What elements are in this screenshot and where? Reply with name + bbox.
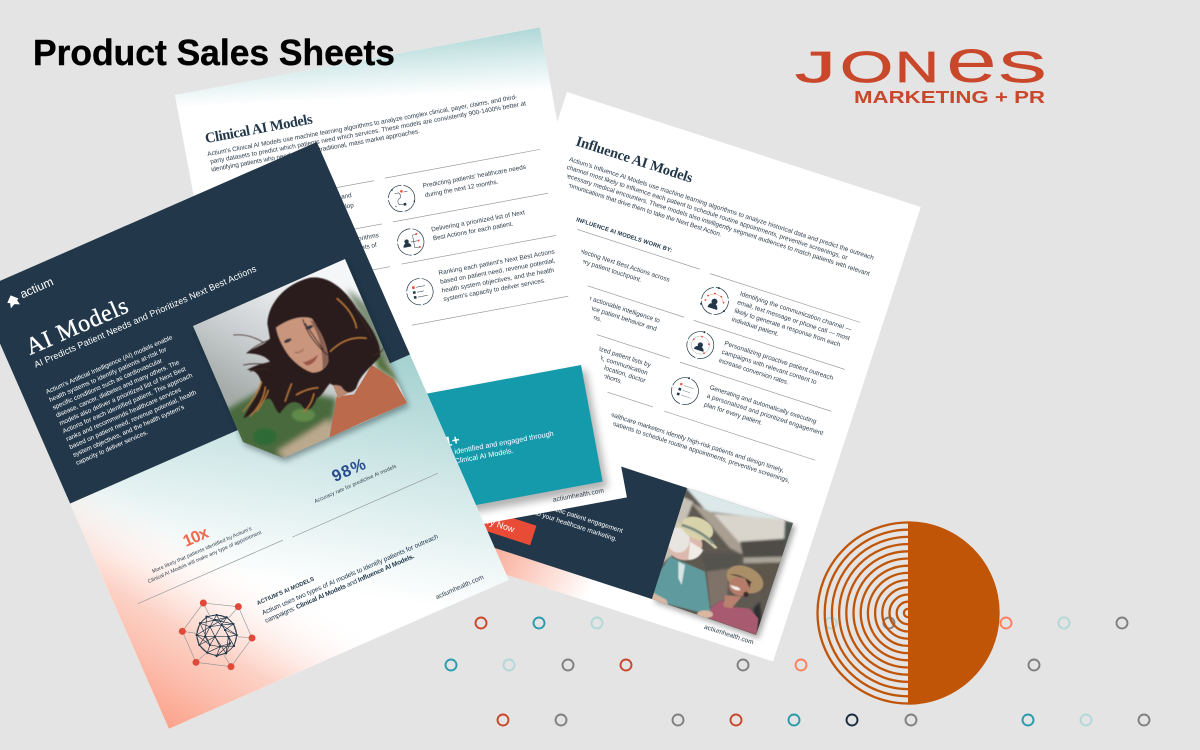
- text: ranking actions: [438, 248, 560, 303]
- icon: neural network: [179, 599, 255, 670]
- subheading: how models work: ACTIUM'S INFLUENCE AI MODELS WORK BY:: [546, 208, 673, 254]
- text: Actium's AI models: ACTIUM'S AI MODELS: [256, 577, 315, 607]
- left column text items: Creating prioritized patient lists by: [558, 333, 652, 369]
- icon: personalized outreach: [683, 327, 718, 362]
- body paragraph: ranks and recommends healthcare services: [65, 387, 182, 443]
- text: personalized outreach: [718, 340, 834, 399]
- closing paragraph: Actium's AI Models help healthcare marketers identify high-risk patients and design timely,: [540, 389, 785, 474]
- icon: ranking actions: [405, 276, 435, 307]
- stat: 98%: [305, 444, 398, 505]
- panel: AI Models sheet: [0, 142, 508, 729]
- stat: 98%: Accuracy rate for predictive AI models: [313, 464, 398, 505]
- icon: next best actions list: [395, 227, 426, 257]
- intro paragraph: channel most likely to influence each patient to schedule routine appointments, preventive screenings, or: [566, 164, 849, 262]
- bottom salmon gradient: [419, 526, 593, 601]
- stat: 10x: More likely that patients identified by Actium's: [151, 526, 253, 575]
- closing paragraph: personalized outreach that drives patients to schedule routine appointments, preventive screenings,: [521, 391, 791, 485]
- logo: actium: actium: [18, 274, 55, 301]
- teal stat box: [257, 364, 608, 549]
- text: next best actions list: Best Actions for each patient.: [432, 221, 514, 242]
- text: engagement plan: [703, 384, 827, 446]
- website: actiumhealth.com: [435, 574, 485, 601]
- left column text items: Applying proprietary AI algorithms: [284, 232, 379, 256]
- stat caption: Patients identified and engaged through: [426, 429, 554, 461]
- text: engagement plan: Generating and automatically executing: [709, 384, 818, 426]
- heading: Influence AI Models: Influence AI Models: [574, 134, 695, 187]
- left column text items: channel, location, doctor: [578, 357, 647, 385]
- logo: Jones Marketing + PR: [795, 28, 1046, 107]
- decorative ring dots: [446, 618, 1150, 726]
- icon: communication channel: [698, 283, 732, 318]
- text: ranking actions: based on patient need, revenue potential,: [440, 257, 556, 286]
- title: Product Sales Sheets: [33, 32, 395, 73]
- body paragraph: based on patient need, revenue potential, health: [68, 389, 198, 451]
- logo: Jones Marketing + PR: O: [840, 43, 893, 92]
- left column text items: Providing actionable intelligence to: [565, 288, 661, 325]
- lower gradient area: [67, 348, 509, 729]
- top teal gradient: [175, 27, 553, 164]
- heading: AI Models: AI Models: [22, 293, 132, 361]
- left column text items: [540, 247, 679, 393]
- logo: Jones Marketing + PR: e: [946, 28, 997, 95]
- body paragraph: [44, 333, 208, 467]
- text: engagement plan: plan for every patient.: [703, 401, 763, 427]
- concentric half circle graphic: [818, 521, 1000, 705]
- photo: woman with windswept hair: [190, 255, 417, 462]
- logo: Jones Marketing + PR: S: [998, 42, 1046, 92]
- text: personalized outreach: campaigns with relevant content to: [721, 349, 818, 386]
- left column text items: [237, 189, 381, 273]
- text: communication channel: [731, 291, 854, 359]
- body paragraph: models also deliver a prioritized list of Next Best: [58, 366, 187, 427]
- left column text items: and cohorts.: [587, 368, 623, 386]
- text: personalized outreach: increase conversion rates.: [718, 357, 790, 387]
- orange top: [329, 365, 407, 438]
- banner text: to your healthcare marketing.: [534, 510, 618, 543]
- intro paragraph: communications that drive them to take the Next Best Action.: [560, 180, 723, 239]
- left column text items: influence patient behavior and: [574, 300, 658, 333]
- text: communication channel: individual patient.: [731, 316, 780, 338]
- navy header block: [0, 142, 410, 503]
- body paragraph: system objectives, and the health system's: [72, 404, 185, 459]
- stat number: 1+: [443, 432, 461, 450]
- text: next best actions list: Delivering a prioritized list of Next: [431, 209, 526, 233]
- text: ranking actions: Ranking each patient's Next Best Actions: [438, 248, 555, 277]
- hair mass: [243, 277, 380, 418]
- left column text items: risk, communication: [593, 353, 649, 377]
- text: personalized outreach: Personalizing proactive patient outreach: [723, 340, 834, 382]
- photo: older couple: [650, 485, 800, 638]
- left column text items: Selecting Next Best Actions across: [575, 247, 671, 284]
- logo: Jones Marketing + PR: J: [795, 42, 836, 91]
- left column text items: identify patients who will develop: [262, 202, 355, 226]
- left column text items: Analyzing patient data to understand and: [237, 192, 353, 220]
- text: communication channel: email, text message or phone call — most: [736, 299, 851, 342]
- logo: Jones Marketing + PR: MARKETING + PR: [854, 87, 1045, 107]
- intro paragraph: Actium's Clinical AI Models use machine learning algorithms to analyze complex clinical, payer, claims, and third-: [207, 94, 518, 158]
- text: predicting needs: Predicting patients' healthcare needs: [422, 164, 527, 190]
- body paragraph: Actium's Artificial Intelligence (AI) models enable: [45, 334, 174, 396]
- text: communication channel: Identifying the communication channel —: [739, 291, 853, 334]
- stat caption: Actium's Clinical AI Models.: [425, 446, 514, 471]
- text: Actium's AI models: Actium uses two types of AI models to identify patients for outreach: [261, 533, 440, 617]
- text: predicting needs: during the next 12 months.: [424, 179, 499, 199]
- body paragraph: disease, cancer, diabetes and many others. The: [55, 359, 181, 419]
- icon: predicting needs: [386, 183, 417, 214]
- subheading: AI Predicts Patient Needs and Prioritizes Next Best Actions: [33, 263, 258, 370]
- panel: Influence AI Models sheet: [484, 92, 921, 662]
- stat: 10x: Clinical AI Models will make any type of appointment: [147, 530, 263, 585]
- body paragraph: Actions for each identified patient. This approach: [62, 372, 194, 435]
- text: ranking actions: health system objectives, and the health: [441, 267, 555, 295]
- body paragraph: capacity to deliver services.: [75, 429, 149, 467]
- intro paragraph: party datasets to predict which patients need which services. These models are consistently 900-1400% better at: [210, 100, 527, 166]
- left column text items: to large datasets of: [323, 242, 378, 259]
- body paragraph: specific conditions such as cardiovascular: [52, 357, 164, 412]
- intro paragraph: necessary medical encounters. These models also intelligently segment audiences to match patients with relevant: [563, 172, 871, 278]
- button: Try Now: Try Now: [481, 515, 516, 535]
- text: ranking actions: system's capacity to deliver services.: [443, 277, 547, 303]
- intro paragraph: Actium's Influence AI Models use machine learning algorithms to analyze historical data and predict the outreach: [568, 156, 875, 262]
- heading: Clinical AI Models: Clinical AI Models: [204, 111, 314, 147]
- website: actiumhealth.com: [703, 624, 755, 647]
- left column text items: actions.: [579, 310, 603, 324]
- logo: actium: [4, 274, 56, 309]
- stat: 98%: 98%: [329, 455, 369, 486]
- left column text items: every patient touchpoint.: [574, 256, 643, 284]
- button: Try Now: [430, 493, 536, 545]
- text: engagement plan: a personalized and prioritized engagement: [706, 393, 824, 437]
- banner text: Learn how to bring scientific patient engagement: [486, 484, 624, 535]
- text: Actium's AI models: campaigns: Clinical AI Models and Influence AI Models.: [264, 553, 416, 625]
- logo: Jones Marketing + PR: N: [895, 43, 939, 92]
- stat: 10x: 10x: [180, 523, 212, 551]
- face: [276, 317, 328, 373]
- body paragraph: health systems to identify patients at-risk for: [48, 346, 169, 404]
- icon: engagement plan: [668, 373, 702, 408]
- stat: 10x: [136, 504, 263, 585]
- navy call to action banner: [426, 415, 688, 599]
- text: communication channel: likely to generate a response from each: [733, 308, 842, 349]
- panel: Clinical AI Models sheet: [175, 27, 627, 565]
- intro paragraph: identifying patients who need care than traditional, mass market approaches.: [211, 128, 421, 174]
- website: actiumhealth.com: [552, 487, 605, 504]
